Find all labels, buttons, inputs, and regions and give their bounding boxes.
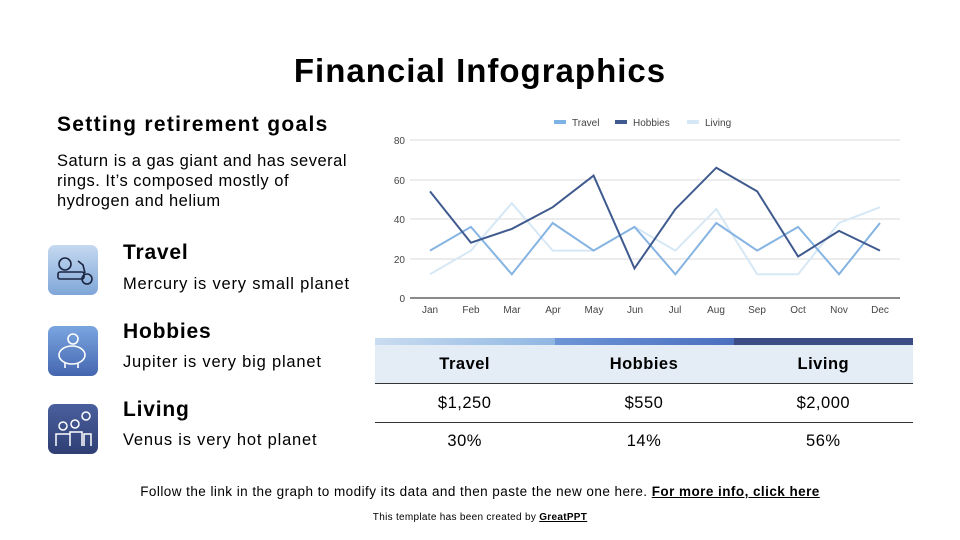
footer note: Follow the link in the graph to modify its data and then paste the new one here. For more info, click here <box>140 484 820 499</box>
line chart: Jul <box>669 305 681 316</box>
line chart: 20 <box>394 255 405 266</box>
travel text: Mercury is very small planet <box>123 275 350 293</box>
text: 14% <box>627 432 661 450</box>
line chart: Oct <box>790 305 806 316</box>
hobbies label: Hobbies <box>123 320 211 343</box>
heading: retirement goals: Setting retirement goals <box>57 113 329 136</box>
hobbies text: Jupiter is very big planet <box>123 353 322 371</box>
text: 56% <box>806 432 841 450</box>
living label: Living <box>123 398 190 421</box>
line chart: 0 <box>399 294 405 305</box>
data table: $550 <box>625 394 663 412</box>
line chart: Jan <box>422 305 438 316</box>
line chart <box>394 118 900 316</box>
data table: $2,000 <box>797 394 850 412</box>
item: travel <box>48 241 350 295</box>
item: hobbies <box>48 320 322 376</box>
line chart: Sep <box>748 305 766 316</box>
item: living <box>48 398 317 454</box>
legend <box>554 118 731 129</box>
legend: Travel <box>572 118 599 129</box>
data table: Living <box>798 355 849 373</box>
legend: Hobbies <box>633 118 670 129</box>
text: 30% <box>447 432 482 450</box>
data table: Hobbies <box>610 355 678 373</box>
legend: Living <box>705 118 731 129</box>
living text: Venus is very hot planet <box>123 431 317 449</box>
line chart: 60 <box>394 176 405 187</box>
line chart: Mar <box>503 305 521 316</box>
line chart: Jun <box>627 305 643 316</box>
icon: piggy bank <box>48 326 98 376</box>
intro text: Saturn is a gas giant and has several rings. It’s composed mostly of hydrogen and helium <box>57 152 347 210</box>
line chart: May <box>585 305 603 316</box>
line chart: 80 <box>394 136 405 147</box>
line chart: Nov <box>830 305 848 316</box>
data table <box>375 338 913 450</box>
line chart: Apr <box>545 305 561 316</box>
travel label: Travel <box>123 241 189 264</box>
line chart: Feb <box>462 305 480 316</box>
line chart: 40 <box>394 215 405 226</box>
icon: scooter <box>48 245 98 295</box>
data table: $1,250 <box>438 394 491 412</box>
line chart: Aug <box>707 305 725 316</box>
credit: This template has been created by GreatPPT <box>373 512 587 523</box>
data table: Travel <box>439 355 490 373</box>
title: Financial Infographics <box>294 52 666 89</box>
icon: family <box>48 404 98 454</box>
line chart: Dec <box>871 305 889 316</box>
